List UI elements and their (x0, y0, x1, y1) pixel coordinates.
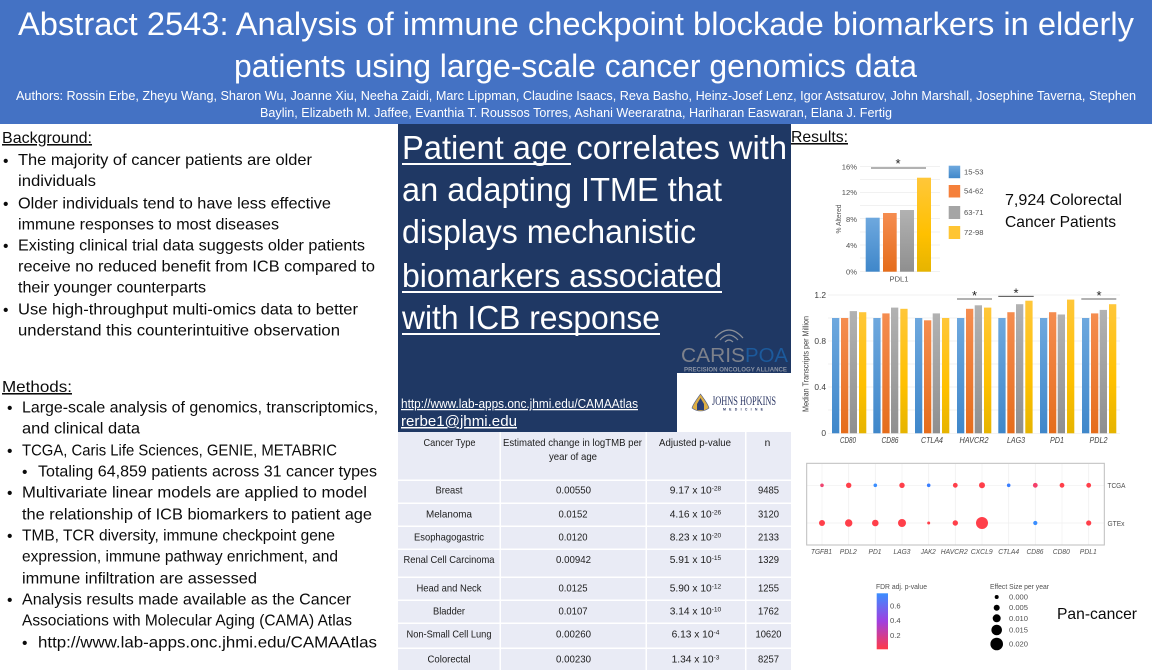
methods bullet list: Totaling 64,859 patients across 31 cancer types (38, 464, 377, 480)
gene labels: HAVCR2 (960, 435, 989, 445)
methods bullet list: Multivariate linear models are applied to model (22, 484, 367, 502)
table rows: 4.16 x 10 (670, 510, 712, 520)
methods bullet list: • (7, 400, 12, 417)
background bullet list: individuals (18, 173, 96, 190)
table rows: 3.14 x 10 (670, 606, 712, 618)
table rows: 10620 (756, 630, 782, 640)
bars: CD80 (832, 311, 866, 433)
table rows: Melanoma (426, 510, 472, 520)
table rows: Non-Small Cell Lung (406, 630, 492, 640)
authors: Baylin, Elizabeth M. Jaffee, Evanthia T. Roussos Torres, Ashani Weeraratna, Hariharan Easwaran, Elana J. Fertig (260, 105, 892, 120)
methods bullet list: • (7, 443, 12, 460)
methods bullet list: TMB, TCR diversity, immune checkpoint gene (22, 528, 335, 544)
axis labels: 0% (846, 268, 857, 276)
legend: FDR colour bar: 0.4 (890, 616, 901, 625)
table: logTMB change by cancer type (398, 432, 791, 670)
gene labels: LAG3 (1007, 435, 1025, 445)
table rows: -20 (712, 532, 722, 540)
gene labels: CD86 (1026, 547, 1044, 556)
table rows: -12 (712, 584, 722, 590)
table rows: 0.00550 (556, 486, 591, 496)
background bullet list: • (3, 302, 8, 319)
axis labels: 12% (842, 188, 857, 197)
gene labels: PDL2 (1090, 435, 1108, 445)
gene labels: TGFB1 (811, 547, 832, 556)
table rows: 9.17 x 10 (670, 486, 712, 496)
gene labels: PD1 (868, 547, 882, 556)
row labels: TCGA (1108, 481, 1126, 490)
label: colorectal patients: 7,924 Colorectal (1005, 192, 1122, 209)
methods bullet list: TCGA, Caris Life Sciences, GENIE, METABRIC (22, 442, 337, 460)
background bullet list: Use high-throughput multi-omics data to better (18, 302, 358, 318)
gene labels: CD80 (840, 435, 856, 445)
table rows: 6.13 x 10 (672, 630, 714, 640)
table rows: 0.00260 (556, 630, 591, 640)
background bullet list: • (3, 153, 8, 170)
gene labels: HAVCR2 (941, 547, 968, 556)
legend: FDR colour bar: 0.6 (890, 602, 901, 610)
table rows: 1255 (758, 584, 779, 594)
table rows: -3 (714, 654, 720, 662)
gene labels: CD80 (1053, 547, 1070, 556)
gene labels: PDL1 (1080, 547, 1097, 556)
significance markers (957, 286, 1116, 303)
axis labels: 1.2 (814, 290, 826, 300)
methods bullet list: expression, immune pathway enrichment, and (22, 548, 338, 566)
axis labels (814, 290, 826, 438)
background bullet list: their younger counterparts (18, 280, 206, 296)
key message text: displays mechanistic (402, 213, 696, 250)
background bullet list (3, 152, 375, 340)
link: email: rerbe1@jhmi.edu (401, 413, 517, 430)
table rows: 1.34 x 10 (672, 654, 714, 666)
table rows: -4 (714, 630, 720, 636)
gene labels: CTLA4 (921, 435, 943, 445)
gene labels: CTLA4 (998, 547, 1019, 556)
bars: LAG3 (998, 301, 1033, 433)
dots: TCGA row (820, 482, 1091, 488)
key message text: with ICB response (401, 299, 660, 336)
axis labels: 16% (842, 162, 857, 172)
methods bullet list: • (7, 485, 12, 502)
bar chart: PDL1 alteration by age: % Altered (834, 204, 843, 234)
axis labels: 0.4 (814, 382, 826, 392)
gene labels: PDL2 (840, 547, 857, 556)
legend: FDR colour bar: 0.2 (890, 631, 901, 640)
table rows: -15 (712, 555, 722, 562)
background bullet list: • (3, 196, 8, 213)
legend: age groups: 72-98 (964, 228, 983, 237)
background bullet list: The majority of cancer patients are older (18, 152, 312, 169)
logo: Caris POA (681, 330, 789, 374)
significance marker: * (895, 156, 901, 171)
row labels: GTEx (1108, 519, 1125, 528)
background bullet list: receive no reduced benefit from ICB compared to (18, 258, 375, 276)
legend: effect size: 0.010 (1009, 614, 1028, 623)
panel: key message (398, 124, 791, 432)
title: patients using large-scale cancer genomics data (234, 48, 917, 84)
table rows: Renal Cell Carcinoma (404, 555, 495, 566)
methods bullet list: and clinical data (22, 420, 140, 438)
axis labels: 8% (846, 215, 857, 224)
bar chart: median transcripts per million: Median Transcripts per Million (800, 316, 810, 412)
legend: FDR colour bar: FDR adj. p-value (876, 582, 927, 591)
gene labels (811, 547, 1097, 556)
logo: Caris POA: POA (745, 345, 789, 367)
heading: methods: Methods: (2, 379, 72, 396)
legend: effect size: Effect Size per year (990, 582, 1049, 591)
gene labels: JAK2 (920, 547, 936, 556)
table rows: -28 (712, 486, 722, 492)
key message text: an adapting ITME that (402, 171, 722, 208)
table rows: Colorectal (428, 654, 470, 666)
authors: Authors: Rossin Erbe, Zheyu Wang, Sharon Wu, Joanne Xiu, Neeha Zaidi, Marc Lippman, Claudine Isaacs, Reva Basho, Heinz-Josef Lenz, Igor Astsaturov, John Marshall, Josephine Taverna, Stephen (16, 88, 1136, 103)
table rows: 0.00942 (556, 555, 591, 566)
panel: background (2, 130, 375, 340)
link: atlas url: http://www.lab-apps.onc.jhmi.edu/CAMAAtlas (401, 397, 638, 411)
background bullet list: Older individuals tend to have less effective (18, 196, 331, 212)
axis labels: 0 (821, 428, 826, 438)
bars: HAVCR2 (957, 305, 991, 433)
background bullet list: immune responses to most diseases (18, 216, 279, 234)
table rows: 0.00230 (556, 654, 591, 666)
table rows: 1329 (758, 555, 779, 566)
methods bullet list: Large-scale analysis of genomics, transcriptomics, (22, 400, 378, 416)
table rows: Bladder (433, 606, 466, 618)
logo: Caris POA: PRECISION ONCOLOGY ALLIANCE (684, 368, 787, 374)
bar chart: PDL1 alteration by age (834, 156, 983, 284)
heading: background: Background: (2, 130, 92, 147)
methods bullet list: Analysis results made available as the Cancer (22, 592, 351, 608)
dot plot: TCGA and GTEx effect sizes (807, 463, 1126, 556)
methods bullet list: the relationship of ICB biomarkers to patient age (22, 506, 372, 524)
heading: results: Results: (791, 129, 848, 146)
logo: Johns Hopkins Medicine (677, 373, 791, 432)
table rows: 5.91 x 10 (670, 555, 712, 566)
background bullet list: • (3, 238, 8, 255)
table rows: 3120 (758, 510, 779, 520)
table rows: 5.90 x 10 (670, 584, 712, 594)
table header: Cancer Type (424, 438, 476, 449)
legend: FDR colour bar (876, 582, 927, 649)
table header: year of age (549, 452, 597, 463)
label: pan-cancer: Pan-cancer (1057, 606, 1137, 623)
legend: effect size: 0.015 (1009, 626, 1028, 634)
table rows: -10 (712, 606, 722, 614)
methods bullet list: immune infiltration are assessed (22, 570, 257, 588)
table header: Adjusted p-value (659, 438, 731, 449)
methods bullet list: Associations with Molecular Aging (CAMA) Atlas (22, 612, 352, 630)
bar chart: median transcripts per million (800, 286, 1120, 445)
header banner (0, 0, 1152, 124)
bars: PDL2 (1082, 304, 1116, 433)
table rows: 0.0120 (558, 532, 588, 544)
methods bullet list: • (7, 592, 12, 609)
significance markers: * (1013, 286, 1019, 300)
table rows: 2133 (758, 532, 779, 544)
key message text (401, 129, 787, 336)
table rows (404, 486, 782, 666)
methods bullet list: • (22, 635, 27, 652)
significance markers: * (1096, 288, 1102, 303)
methods bullet list: • (7, 528, 12, 545)
significance marker (871, 156, 926, 171)
gene labels: CD86 (882, 435, 899, 445)
logo: Johns Hopkins Medicine: MEDICINE (723, 408, 764, 412)
table rows: 1762 (758, 606, 779, 618)
methods bullet list: http://www.lab-apps.onc.jhmi.edu/CAMAAtlas (38, 634, 377, 652)
dots: GTEx row (819, 517, 1091, 529)
background bullet list: understand this counterintuitive observation (18, 322, 340, 340)
gene labels: LAG3 (894, 547, 911, 556)
key message text: biomarkers associated (402, 257, 722, 294)
gene labels (840, 435, 1108, 445)
table rows: Breast (436, 486, 463, 496)
panel: methods (2, 379, 378, 652)
legend: age groups (949, 166, 983, 239)
gene labels: PD1 (1050, 435, 1064, 445)
title: Abstract 2543: Analysis of immune checkpoint blockade biomarkers in elderly (18, 6, 1134, 42)
table rows: Esophagogastric (414, 532, 484, 544)
bar chart: PDL1 alteration by age: PDL1 (890, 274, 908, 284)
gene labels: CXCL9 (971, 547, 993, 556)
legend: age groups: 54-62 (964, 186, 983, 196)
table rows: 0.0152 (558, 510, 588, 520)
table rows: -26 (712, 510, 722, 516)
methods bullet list (7, 400, 378, 652)
legend: effect size (990, 582, 1049, 650)
label: colorectal patients: Cancer Patients (1005, 214, 1116, 231)
legend: effect size: 0.020 (1009, 640, 1028, 648)
logo: Johns Hopkins Medicine: JOHNS HOPKINS (712, 393, 776, 408)
table header: Estimated change in logTMB per (503, 438, 643, 449)
legend: effect size: 0.005 (1009, 603, 1028, 612)
methods bullet list: • (22, 464, 27, 481)
legend: age groups: 63-71 (964, 208, 983, 217)
axis labels: 0.8 (814, 336, 826, 346)
axis labels (842, 162, 857, 276)
title (18, 6, 1134, 84)
bars: CTLA4 (915, 313, 949, 433)
table rows: 0.0125 (558, 584, 588, 594)
label: colorectal patients (1005, 192, 1122, 231)
logo: Caris POA: CARIS (681, 345, 745, 367)
axis labels: 4% (846, 241, 857, 250)
row labels (1108, 481, 1126, 528)
bars: CD86 (873, 308, 908, 433)
bars: PD1 (1040, 300, 1074, 433)
legend: effect size: 0.000 (1009, 592, 1028, 602)
table rows: 9485 (758, 486, 779, 496)
table rows: 8257 (758, 654, 779, 666)
table header: n (765, 438, 770, 449)
key message text: Patient age correlates with (402, 129, 787, 166)
legend: age groups: 15-53 (964, 168, 983, 176)
table rows: Head and Neck (416, 584, 482, 594)
table rows: 8.23 x 10 (670, 532, 712, 544)
table header (424, 438, 770, 463)
background bullet list: Existing clinical trial data suggests older patients (18, 238, 365, 254)
authors (16, 88, 1136, 120)
table rows: 0.0107 (558, 606, 588, 618)
significance markers: * (972, 288, 977, 303)
